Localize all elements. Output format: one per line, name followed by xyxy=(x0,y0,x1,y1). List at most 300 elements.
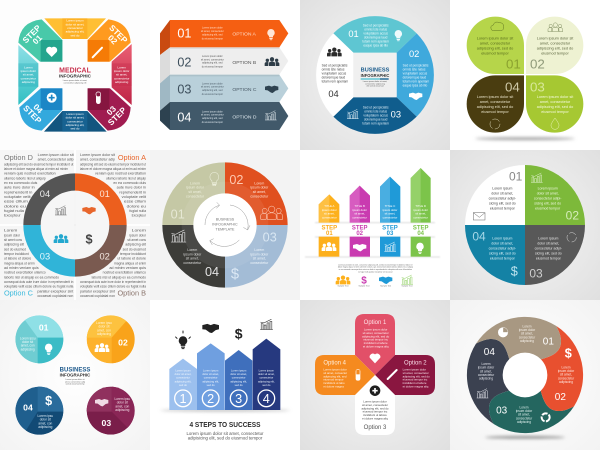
text block: top left: adipiscing elit sed do eiusmod tempor incididunt ut xyxy=(4,162,73,166)
text block: bottom left: nostrud exercitation ullamco xyxy=(4,271,46,275)
circle 04: $ xyxy=(45,394,52,408)
step 03: sit amet, xyxy=(385,212,396,216)
segment: bottom 03: doloremque laud xyxy=(364,117,388,121)
segment: step 01: STEP xyxy=(20,23,43,45)
arrow: option A: 01 xyxy=(177,27,191,41)
segment: left 04: doloremque laud xyxy=(322,75,345,79)
segment: right 02: omnis iste natus xyxy=(403,67,426,71)
segment 03: consectetur xyxy=(516,416,532,420)
step 01: ipsum dolor xyxy=(322,208,337,212)
text block: top right: aute irure dolor in xyxy=(117,186,146,190)
segment 01: adipiscing xyxy=(520,339,534,343)
panel: step arrows xyxy=(300,150,450,300)
shadow xyxy=(485,436,565,439)
panel: quarter pie xyxy=(450,150,600,300)
arm: option 1: adipiscing elit, sed do xyxy=(362,334,390,338)
quadrant 03: 03 xyxy=(263,230,277,244)
circle 01: amet, con xyxy=(21,344,35,348)
step 02: ipsum dolor xyxy=(352,208,367,212)
option headers xyxy=(4,153,146,298)
leaf 04: eiusmod tempor xyxy=(481,110,509,114)
step 04: 04 xyxy=(417,231,425,237)
panel: swirl donut xyxy=(450,300,600,450)
ring segment 03: 03 xyxy=(40,251,50,261)
text block: top right: reprehenderit in xyxy=(119,190,146,194)
panel: template donut xyxy=(150,150,300,300)
circle 03 xyxy=(86,386,135,435)
arrow 4: dolor sit amet, xyxy=(258,372,275,376)
ring segment 03 xyxy=(23,225,75,277)
segment 02: adipiscing xyxy=(559,380,573,384)
quadrant 01 xyxy=(162,162,225,225)
leaf 01: eiusmod tempor xyxy=(481,51,509,55)
segment: top 01: doloremque laud xyxy=(364,35,388,39)
text block: bottom right: voluptate velit esse cillum dolore eu fugiat nulla xyxy=(80,285,146,289)
arrow 1: Lorem ipsum xyxy=(175,368,191,372)
sector 02: dolor sit amet, xyxy=(537,191,559,195)
ring segment 04 xyxy=(23,173,75,225)
sector 02: eiusmod tempor xyxy=(535,206,561,210)
arm: option 2: sit amet, consectetur xyxy=(403,371,429,375)
sector 02 xyxy=(525,165,585,225)
text block: top right: amet, consectetur adip xyxy=(80,158,115,162)
arm: option 1 xyxy=(355,314,395,375)
segment: top yellow: Lorem ipsum xyxy=(66,19,84,23)
sector 04: sicing elit, sed do xyxy=(489,251,516,255)
segment 04: 04 xyxy=(484,347,495,358)
arrow: option A: Lorem ipsum dolor xyxy=(202,27,223,30)
segment: step 03: 03 xyxy=(104,104,118,117)
legend: Sample Text xyxy=(380,284,392,287)
panel: four circles xyxy=(0,300,150,450)
legend: Sample Text xyxy=(338,284,349,287)
text block: top right: adipiscing elit sed do eiusmod tempor incididunt ut xyxy=(80,162,146,166)
text block: top right: voluptate velit xyxy=(122,195,146,199)
arrow 3: Lorem ipsum xyxy=(231,368,247,372)
arm: option 1: Option 1 xyxy=(364,320,387,326)
quadrant 02: 02 xyxy=(229,173,243,187)
sector 01: dolor sit amet, xyxy=(491,191,513,195)
text block: bottom right: consequat duis aute irure dolor in reprehenderit in xyxy=(80,280,146,284)
text block: top right: Excepteur xyxy=(132,214,147,218)
arrow: option D: sit amet, consectetur xyxy=(201,114,224,117)
arm: option 1: eiusmod tempor inc xyxy=(363,338,389,342)
segment: left 04: Sed ut perspiciatis xyxy=(322,63,348,67)
segment 02 xyxy=(541,326,583,411)
circle 02: dolor sit xyxy=(98,325,110,329)
text block: bottom left: consequat duis aute irure dolor in reprehenderit in xyxy=(4,280,73,284)
description: Lorem ipsum dolor sit amet, consectetur adipiscing elit, sed do eiusmod tempor incididunt ut labore et xyxy=(338,263,413,266)
option headers: Option D xyxy=(4,153,33,162)
step 02: 02 xyxy=(356,231,364,237)
text block: bottom right: occaecat cupidatat non xyxy=(80,294,115,298)
arrow 2: 2 xyxy=(207,392,214,406)
text block: top left: labore et dolore magna aliqua ut enim ad minim xyxy=(4,167,68,171)
arm: option 2: et dolore magna aliq xyxy=(403,384,429,388)
step 01: 01 xyxy=(326,231,333,237)
text block: bottom right: adipiscing elit xyxy=(125,243,146,247)
segment: left aqua: consectetur xyxy=(21,76,36,80)
circle 02: Lorem ipsu xyxy=(96,321,112,325)
panel: medical octagon xyxy=(0,0,150,150)
sector 03: Lorem ipsum xyxy=(538,236,558,240)
arrow: option B: sit amet, consectetur xyxy=(201,58,224,61)
segment 01: consectetur xyxy=(519,335,535,339)
segment 04: ipsum dolor xyxy=(478,366,494,370)
legend xyxy=(336,275,413,287)
segment 02: sit amet, xyxy=(560,373,572,377)
quadrant 03: $ xyxy=(231,266,239,282)
shelf shadows xyxy=(305,222,440,257)
leaf 02 xyxy=(526,17,583,74)
segment: bottom 03: 03 xyxy=(391,110,401,120)
arrow: option A: OPTION A xyxy=(232,32,257,38)
text block: top left: dolore eu xyxy=(4,204,26,208)
step 02 xyxy=(350,186,370,257)
arm: option 4: sit amet, consectet xyxy=(323,371,347,375)
arm: option 2: adipiscing elit, sed do xyxy=(403,374,430,378)
quadrant 03: sit amet, xyxy=(253,257,266,261)
shadow xyxy=(160,409,290,411)
text block: bottom left: magna aliqua ut enim xyxy=(4,261,35,265)
arrow: option C: 03 xyxy=(177,83,191,97)
ring segment 01 xyxy=(75,173,127,225)
arm: option 3: eiusmod tempor inc xyxy=(363,410,388,414)
arrow: option D: Lorem ipsum dolor xyxy=(202,110,223,113)
segment: left aqua xyxy=(18,45,38,105)
text block: top right: labore et dolore magna aliqua ut enim ad minim xyxy=(80,167,146,171)
segment: top 01: voluptatem accus xyxy=(363,31,388,35)
text block: bottom left: tempor incididunt xyxy=(4,252,29,256)
arrow: option B: adipiscing elit, sed xyxy=(202,62,223,65)
arrow: option C: adipiscing elit, sed xyxy=(202,89,223,92)
segment 03: sit amet, xyxy=(518,413,530,417)
segment: left aqua: sit amet, xyxy=(23,73,34,77)
step 04: consectetur xyxy=(413,215,428,219)
quadrant 02: ipsum dolor xyxy=(250,186,269,190)
segment: top 01: totam rem aperiam xyxy=(362,39,389,43)
text block: top right: esse cillum xyxy=(124,200,146,204)
circle 01: 01 xyxy=(39,322,49,332)
circle 01: dolor sit xyxy=(22,340,33,344)
text block: bottom left: pariatur excepteur sint xyxy=(37,289,73,293)
step 01: consectetur xyxy=(322,215,337,219)
arrow 1: 1 xyxy=(179,392,187,406)
arrow: option D: adipiscing elit, sed xyxy=(202,117,223,120)
ring segment 04: 04 xyxy=(40,189,50,199)
segment: right 02: doloremque laud xyxy=(403,75,426,79)
arm: option 4: adipiscing elit, sed xyxy=(323,374,347,378)
segment: bottom navy xyxy=(44,111,107,132)
title: 4 STEPS TO SUCCESS xyxy=(189,420,260,429)
panel: four steps to success xyxy=(150,300,300,450)
leaf 03: adipiscing elit, sed do xyxy=(537,105,573,109)
segment: top yellow xyxy=(44,18,106,39)
arrow: option B xyxy=(160,47,288,83)
arm: option 2 xyxy=(375,355,435,395)
leaf 02: Lorem ipsum dolor sit xyxy=(537,36,574,40)
sector 02: Lorem ipsum xyxy=(538,186,558,190)
leaf 01: Lorem ipsum dolor sit xyxy=(477,36,514,40)
segment: step 03 xyxy=(88,88,131,131)
title: Lorem ipsum dolor sit amet, consectetur xyxy=(187,431,264,436)
arrow 1: adipiscing elit, xyxy=(175,379,192,383)
panel: paper ring xyxy=(0,150,150,300)
arm: option 2: Lorem ipsum dolor xyxy=(403,368,426,372)
segment 02: ipsum dolor xyxy=(558,369,574,373)
arrow: option D: 04 xyxy=(177,111,191,125)
segment 03: 03 xyxy=(496,406,508,417)
circle 04: adipiscing xyxy=(38,425,53,429)
arrow: option C: do eiusmod tempor xyxy=(202,93,223,96)
legend: $ xyxy=(361,275,367,286)
segment: right pink xyxy=(112,44,132,105)
center title: consectetur adipiscing xyxy=(365,82,385,85)
arrow: option C xyxy=(160,75,288,111)
description: eu fugiat nulla pariatur excepteur sint occaecat xyxy=(358,270,393,273)
segment: bottom navy: dolor sit amet, xyxy=(66,116,85,120)
step 03: ipsum dolor xyxy=(383,208,397,212)
quadrant 04: sit amet, xyxy=(186,257,199,261)
circle 02: 02 xyxy=(118,338,128,348)
text block: bottom right: Lorem xyxy=(132,229,146,233)
segment: right 02: Sed ut perspiciatis xyxy=(403,63,429,67)
step 03: consectetur xyxy=(383,215,397,219)
segment: bottom 03: voluptatem accus xyxy=(363,113,388,117)
segment: bottom 03: totam rem aperiam xyxy=(362,121,389,125)
step 01 xyxy=(319,194,339,257)
center title xyxy=(59,66,91,84)
center title: BUSINESS xyxy=(361,68,390,74)
segment: left 04: 04 xyxy=(328,89,339,99)
text block: top left: ex ea commodo duis xyxy=(4,181,38,185)
segment 03: ipsum dolor xyxy=(516,409,532,413)
arm: option 4: Lorem ipsum dolor xyxy=(323,368,347,372)
arrow: option B: 02 xyxy=(177,55,191,69)
step 01: sit amet, xyxy=(324,212,335,216)
center title: amet, consectetur adip xyxy=(65,380,86,383)
center title: BUSINESS xyxy=(60,367,91,374)
circle 03: 03 xyxy=(102,418,111,428)
arrow 2 xyxy=(197,343,225,410)
arrow 3: adipiscing elit, xyxy=(230,379,247,383)
option headers: Option A xyxy=(118,153,146,162)
arm: option 2: Option 2 xyxy=(404,361,427,367)
text block: bottom right: ad minim veniam quis xyxy=(109,266,146,270)
sector 03: eiusmod tempor xyxy=(536,256,562,260)
segment: top yellow: dolor sit amet, xyxy=(66,22,85,26)
arrow 1 xyxy=(169,359,197,410)
circle 03: amet, con xyxy=(115,404,129,408)
sector 01: sicing elit, sed do xyxy=(489,201,516,205)
text block: bottom left: ipsum dolor xyxy=(4,233,21,237)
segment: step 04 xyxy=(19,88,62,131)
arm: option 4 xyxy=(315,355,375,395)
segment: left aqua: Lorem xyxy=(24,65,33,69)
text block: bottom left xyxy=(4,229,73,298)
step 03: 03 xyxy=(387,231,394,237)
step 03: STEP xyxy=(382,225,398,231)
text block: top left xyxy=(4,153,74,218)
leaf 01 xyxy=(467,17,524,74)
arrow: option C: OPTION C xyxy=(232,87,257,93)
circle 04: Lorem ipsu xyxy=(38,414,53,418)
arrow: option A xyxy=(160,20,288,55)
arm: option 4: et dolore magna xyxy=(323,384,344,388)
arrow 2: Lorem ipsum xyxy=(203,368,219,372)
arrow 4: sed do xyxy=(262,383,271,387)
circle 04: amet, con xyxy=(38,421,52,425)
segment: top yellow: sed do xyxy=(71,33,80,37)
segment 01: 01 xyxy=(543,336,554,347)
sector 02: consectetur adipi- xyxy=(534,196,561,200)
center cycle xyxy=(193,193,257,257)
arm: option 3 xyxy=(355,375,395,435)
segment 02: 02 xyxy=(555,392,566,403)
title: adipisicing elit, sed do eiusmod tempor xyxy=(188,436,263,441)
text block: bottom left: sit amet cons xyxy=(4,238,22,242)
arrow 3: consectetur xyxy=(232,376,246,380)
arrow 4: consectetur xyxy=(259,376,273,380)
arrow 2: adipiscing elit, xyxy=(202,379,219,383)
segment: top 01: Sed ut perspiciatis xyxy=(363,23,389,27)
segment 03: Lorem xyxy=(520,405,529,409)
segment: right pink: Lorem xyxy=(117,65,126,69)
text block: top right xyxy=(80,153,147,218)
leaf 03: Lorem ipsum dolor sit xyxy=(537,95,574,99)
step 03 xyxy=(380,177,400,257)
segment: right pink: sit amet, xyxy=(116,73,127,77)
arrow: option B: do eiusmod tempor xyxy=(202,66,223,69)
arrow 4 xyxy=(253,339,280,410)
sector 04: dolor sit amet, xyxy=(491,241,513,245)
center title xyxy=(353,53,397,97)
arrow: option A: do eiusmod tempor xyxy=(202,37,223,40)
segment: left 04: voluptatem accus xyxy=(322,71,347,75)
sector 03: consectetur adipi- xyxy=(535,246,562,250)
arm: option 3: sit amet, consectetur xyxy=(362,403,388,407)
leaf 02: 02 xyxy=(530,56,545,71)
segment: step 01 xyxy=(18,19,62,62)
segment 04: sit amet, xyxy=(480,369,492,373)
segment 03 xyxy=(489,391,574,433)
icon row: $ xyxy=(235,326,243,342)
segment 04: Lorem xyxy=(482,362,491,366)
leaf 03: 03 xyxy=(530,80,545,95)
circle 02 xyxy=(86,315,135,364)
circle 03: Lorem ipsu xyxy=(115,397,130,401)
sector 02: sicing elit, sed do xyxy=(534,201,561,205)
arrow: option B: OPTION B xyxy=(232,60,257,66)
quadrant 04: 04 xyxy=(205,265,219,279)
arrow: option A: adipiscing elit, sed xyxy=(202,33,223,36)
text block: bottom left: sed do eiusmod xyxy=(4,247,26,251)
leaf 04: 04 xyxy=(505,80,520,95)
sector 03 xyxy=(525,225,585,285)
segment: step 02: 02 xyxy=(106,33,120,47)
segment: step 03: STEP xyxy=(106,105,128,127)
circle 01 xyxy=(15,315,64,364)
center title xyxy=(60,367,91,386)
segment: right 02: totam rem aperiam xyxy=(403,79,430,83)
text block: bottom left: adipiscing elit xyxy=(4,243,24,247)
quadrant 01: consectetur xyxy=(186,194,205,198)
leaf 01: adipiscing elit, sed do xyxy=(477,46,513,50)
segment 01: Lorem xyxy=(523,324,532,328)
circle 01: Lorem ipsu xyxy=(20,336,36,340)
circle 04: dolor sit xyxy=(40,418,51,422)
segment: left 04 xyxy=(316,33,353,117)
text block: top left: fugiat nulla xyxy=(4,209,24,213)
sector 02: 02 xyxy=(566,208,579,222)
segment: right 02 xyxy=(397,33,434,117)
center title: consectetur adipiscing elit xyxy=(64,81,87,84)
text block: top left: Excepteur xyxy=(4,214,22,218)
circle 02: amet, con xyxy=(97,328,111,332)
description: ex ea commodo consequat duis aute irure dolor in reprehenderit in voluptate velit esse cillum dolore xyxy=(339,268,412,271)
text block: top right: ex ea commodo duis xyxy=(113,181,146,185)
text block: top left: Lorem ipsum dolor sit xyxy=(38,153,74,157)
segment 04: adipiscing xyxy=(479,377,493,381)
title xyxy=(187,420,264,441)
segment: left aqua: ipsum dolor xyxy=(21,69,36,73)
icon row xyxy=(175,319,273,349)
arm: option 4: Option 4 xyxy=(323,361,347,367)
ring segment 02 xyxy=(75,225,127,277)
arrow: option C: Lorem ipsum dolor xyxy=(202,82,223,85)
text block: bottom left: voluptate velit esse cillum dolore eu fugiat nulla xyxy=(4,285,73,289)
center title: INFOGRAPHIC xyxy=(60,373,91,379)
segment: step 04: 04 xyxy=(31,102,45,115)
segment 02: Lorem xyxy=(562,365,571,369)
arm: option 2: eiusmod tempor inc xyxy=(403,378,428,382)
sector 01: 01 xyxy=(509,170,523,184)
circle 04 xyxy=(15,386,64,435)
segment 01: ipsum dolor xyxy=(519,328,535,332)
shadow xyxy=(475,137,575,140)
text block: bottom right: ipsum dolor xyxy=(129,233,147,237)
quadrant 02 xyxy=(225,162,288,225)
arm: option 1: Lorem ipsum dolor xyxy=(364,328,387,332)
sector 01: Lorem ipsum xyxy=(492,186,512,190)
circle 02: adipiscing xyxy=(97,332,111,336)
text block: bottom right: magna aliqua ut enim xyxy=(114,261,146,265)
text block: top left: amet, consectetur adip xyxy=(38,158,74,162)
leaf 03: amet, consectetur xyxy=(540,100,571,104)
leaf 04: Lorem ipsum dolor sit xyxy=(477,95,514,99)
arrow: option C: sit amet, consectetur xyxy=(201,86,224,89)
text block: top left: veniam quis nostrud exercitation xyxy=(4,172,56,176)
leaf 04: adipiscing elit, sed do xyxy=(477,105,513,109)
center title: Lorem ipsum dolor sit amet, xyxy=(63,79,88,82)
arrow 2: consectetur xyxy=(204,376,218,380)
arm: option 3: adipiscing elit, sed do xyxy=(361,406,389,410)
segment: left 04: totam rem aperiam xyxy=(322,79,349,83)
center title: elit sed do eiusmod xyxy=(366,85,384,88)
leaf 02: adipiscing elit, sed do xyxy=(537,46,573,50)
text block: bottom right: laboris nisi ut aliquip ex ea commodo xyxy=(92,275,146,279)
circle 01: adipiscing xyxy=(21,347,35,351)
quadrant 01: sit amet, xyxy=(188,190,202,194)
leaf 03: eiusmod tempor xyxy=(541,110,569,114)
text block: top left: ullamco laboris nisi ut aliquip xyxy=(4,176,46,180)
segment: bottom navy: adipiscing elit, xyxy=(66,123,85,127)
panel: four-leaf clover xyxy=(450,0,600,150)
segment: step 04: STEP xyxy=(21,103,44,126)
segment: left 04: omnis iste natus xyxy=(322,67,345,71)
sector 04: Lorem ipsum xyxy=(492,236,512,240)
segment: right 02: eaque ipsa ab illo xyxy=(403,83,427,87)
